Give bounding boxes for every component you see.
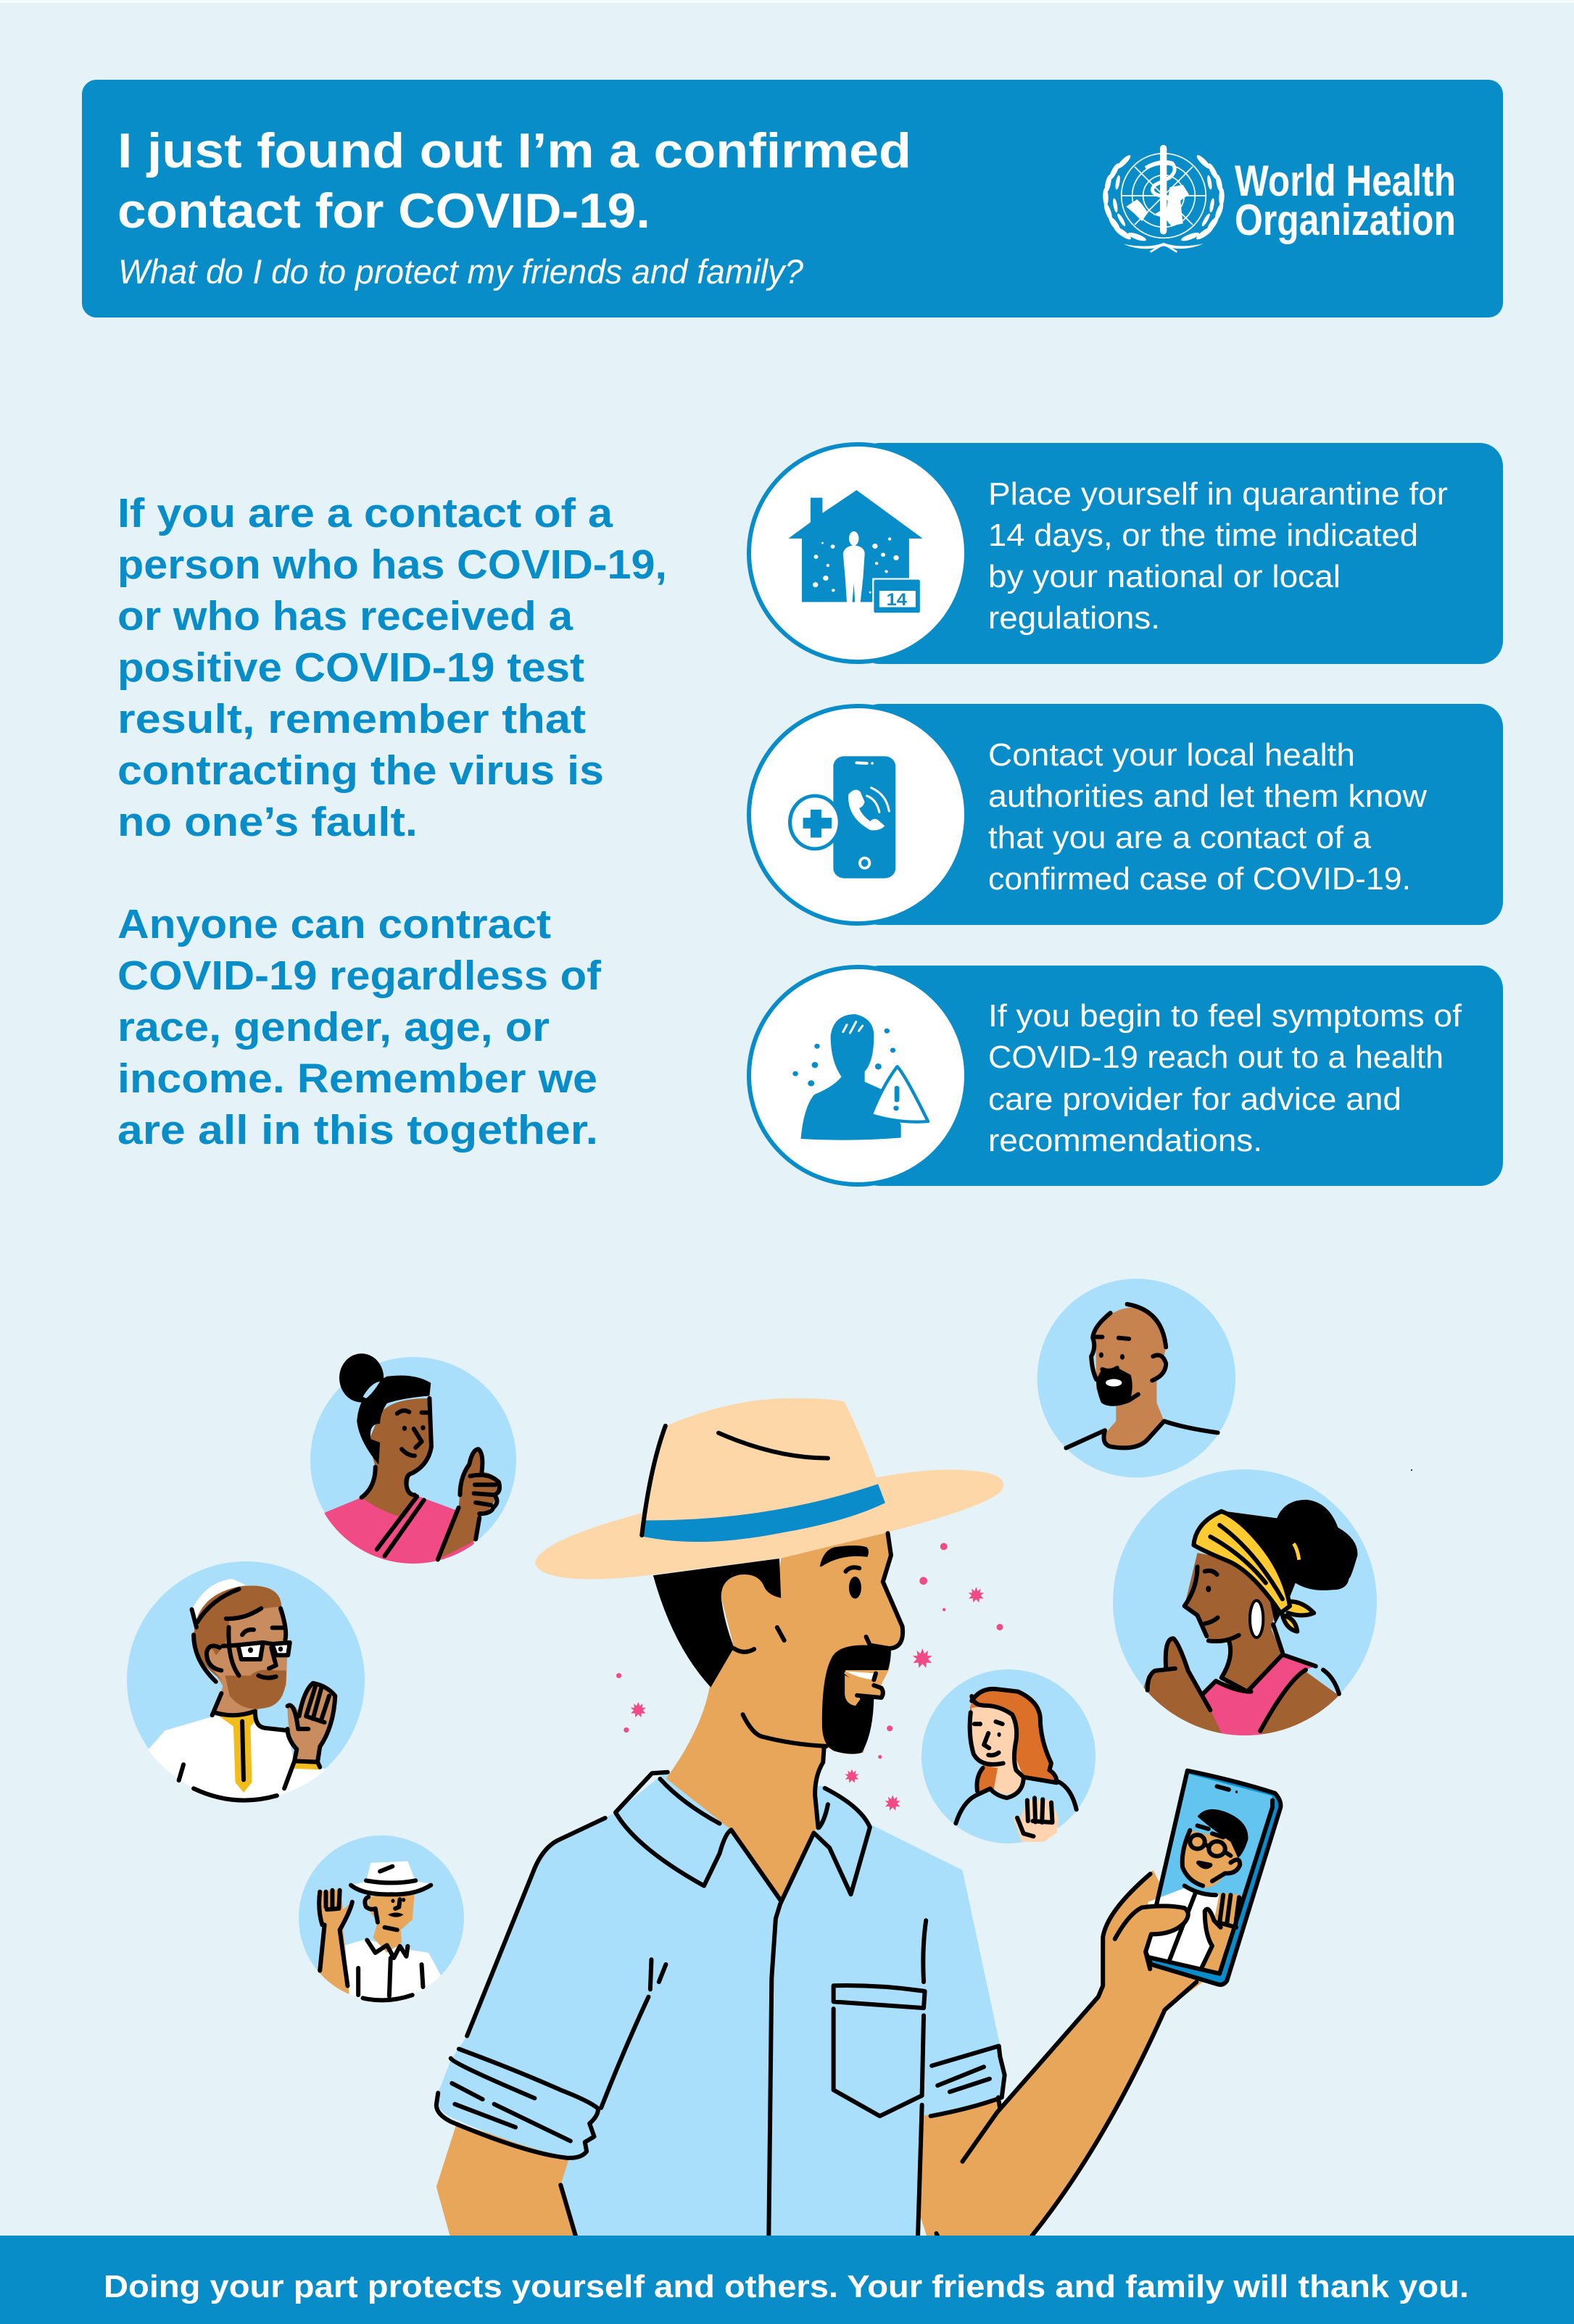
title: I just found out I’m a confirmed — [117, 123, 911, 178]
left text: second paragraph: COVID-19 regardless of — [117, 953, 602, 999]
panel text: authorities and let them know — [988, 779, 1427, 814]
left text: first paragraph: no one’s fault. — [117, 799, 418, 845]
left text: second paragraph — [117, 901, 602, 1153]
panel text: COVID-19 reach out to a health — [988, 1039, 1443, 1075]
panel text: confirmed case of COVID-19. — [988, 861, 1411, 897]
WHO wordmark: World Health — [1235, 157, 1456, 205]
left text: first paragraph — [117, 490, 667, 845]
left text: first paragraph: If you are a contact of a — [117, 490, 613, 536]
friend: woman with yellow headband — [1113, 1469, 1377, 1749]
left text: first paragraph: person who has COVID-19, — [117, 541, 667, 588]
panel text: Contact your local health — [988, 737, 1355, 773]
panel text: care provider for advice and — [988, 1082, 1401, 1117]
panel text — [988, 737, 1427, 897]
friend: bald man with goatee — [1037, 1279, 1235, 1477]
footer banner: Doing your part protects yourself and others. Your friends and family will thank you. — [104, 2269, 1469, 2304]
icon: person with warning triangle — [792, 1014, 928, 1140]
left text: first paragraph: positive COVID-19 test — [117, 644, 584, 691]
panel text: If you begin to feel symptoms of — [988, 998, 1462, 1034]
neck and face — [535, 1398, 1003, 1899]
friend: bearded man with glasses and cap — [127, 1561, 365, 1818]
left text: first paragraph: or who has received a — [117, 593, 573, 639]
panel: symptoms — [749, 966, 1503, 1186]
panel text: that you are a contact of a — [988, 820, 1372, 855]
left text: first paragraph: result, remember that — [117, 696, 586, 742]
panel text: regulations. — [988, 600, 1160, 636]
panel: quarantine — [749, 443, 1503, 664]
panel text: 14 days, or the time indicated — [988, 518, 1418, 553]
left text: first paragraph: contracting the virus is — [117, 747, 604, 794]
main man illustration — [436, 1398, 1280, 2239]
hair — [653, 1559, 781, 1688]
eyebrow and eye — [820, 1545, 869, 1566]
WHO wordmark: Organization — [1235, 196, 1456, 244]
left text: second paragraph: race, gender, age, or — [117, 1004, 550, 1050]
left text: second paragraph: Anyone can contract — [117, 901, 551, 947]
panel text: recommendations. — [988, 1123, 1262, 1158]
icon: house with person and calendar — [788, 490, 923, 615]
WHO wordmark — [1235, 157, 1456, 244]
thumb — [1111, 1906, 1188, 1971]
panel text — [988, 998, 1462, 1158]
shirt — [436, 1772, 1005, 2239]
header banner — [82, 80, 1503, 318]
speck — [1411, 1469, 1412, 1471]
droplets — [616, 1543, 1003, 1811]
phone in hand — [1111, 1771, 1280, 1985]
panel text: Place yourself in quarantine for — [988, 476, 1448, 512]
left text: second paragraph: are all in this together. — [117, 1107, 598, 1153]
panel text: by your national or local — [988, 559, 1341, 594]
WHO emblem — [1103, 145, 1225, 252]
shirt outlines — [436, 1772, 1196, 2236]
friend: woman with hair bun and thumbs up — [310, 1353, 516, 1574]
title — [117, 123, 911, 238]
icon: phone and medical cross — [790, 756, 895, 879]
friend: red-haired woman waving — [921, 1669, 1095, 1843]
panel text — [988, 476, 1448, 636]
title: contact for COVID-19. — [117, 183, 650, 238]
friend: man in white hat waving — [299, 1835, 464, 2012]
subtitle: What do I do to protect my friends and family? — [118, 252, 803, 291]
left text: second paragraph: income. Remember we — [117, 1055, 597, 1102]
arms — [436, 1870, 1208, 2239]
icon: house with person and calendar: 14 — [887, 590, 907, 610]
beard — [822, 1646, 891, 1754]
panel: contact authorities — [749, 704, 1503, 925]
footer banner — [0, 2236, 1574, 2324]
hat — [535, 1398, 1003, 1580]
